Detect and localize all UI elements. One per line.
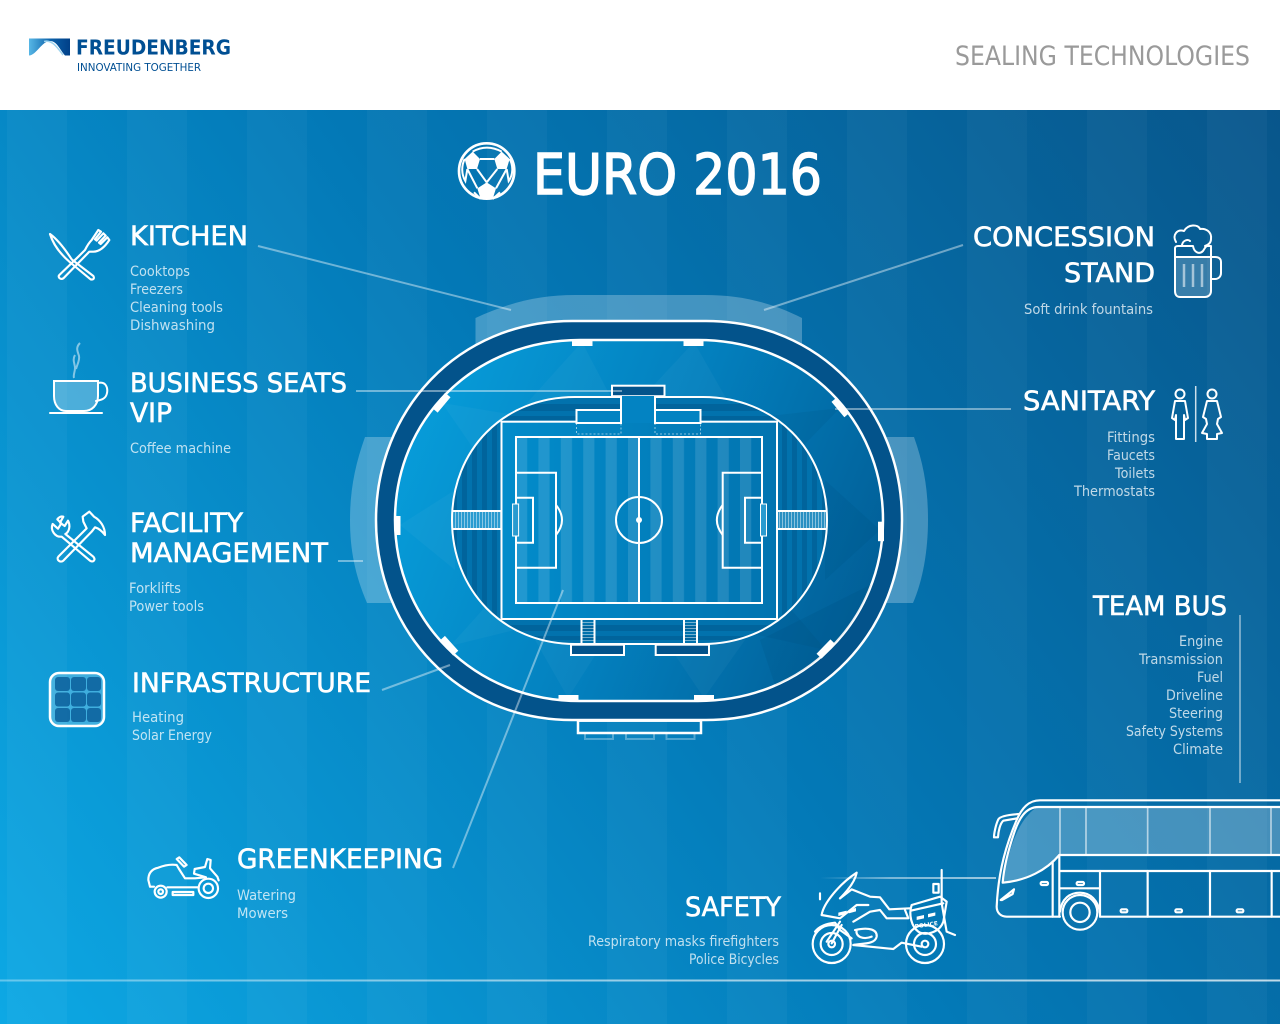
connector beam bbox=[820, 877, 996, 879]
panel: business seats VIP bbox=[50, 343, 347, 457]
floodlight beams bbox=[766, 584, 872, 686]
panel: team bus bbox=[1092, 591, 1227, 758]
stadium ring bbox=[376, 321, 902, 720]
panel: infrastructure: Heating bbox=[132, 710, 184, 726]
leader lines bbox=[258, 245, 1240, 868]
panel: sanitary: SANITARY bbox=[1023, 386, 1156, 417]
icon: wrench and hammer bbox=[52, 512, 105, 562]
panel: greenkeeping bbox=[148, 844, 443, 922]
panel: kitchen: Cooktops bbox=[130, 264, 190, 280]
panel: kitchen: Freezers bbox=[130, 282, 183, 298]
panel: team bus: Climate bbox=[1173, 742, 1223, 758]
icon: solar panel bbox=[50, 673, 104, 726]
floodlights bbox=[395, 340, 884, 701]
header logo: Freudenberg: FREUDENBERG bbox=[76, 36, 231, 60]
panel: safety: SAFETY bbox=[685, 892, 781, 923]
panel: business seats VIP: VIP bbox=[130, 398, 172, 429]
panel: facility management: FACILITY bbox=[130, 508, 243, 539]
panel: kitchen bbox=[50, 221, 248, 334]
panel: team bus: Fuel bbox=[1197, 670, 1223, 686]
panel: greenkeeping: GREENKEEPING bbox=[237, 844, 443, 875]
icon: knife and fork bbox=[50, 230, 109, 280]
panel: facility management: MANAGEMENT bbox=[130, 538, 329, 569]
panel: team bus: Transmission bbox=[1138, 652, 1223, 668]
panel: concession stand bbox=[973, 222, 1221, 318]
panel: greenkeeping: Mowers bbox=[237, 906, 288, 922]
panel: safety: Respiratory masks firefighters bbox=[588, 934, 779, 950]
panel: kitchen: KITCHEN bbox=[130, 221, 248, 252]
bottom stand bbox=[578, 721, 701, 739]
panel: safety: Police Bicycles bbox=[689, 952, 779, 968]
VIP stand at top bbox=[576, 386, 700, 434]
icon: ride-on mower bbox=[148, 857, 219, 898]
panel: greenkeeping: Watering bbox=[237, 888, 296, 904]
title: Euro 2016: EURO 2016 bbox=[533, 143, 822, 208]
panel: infrastructure: Solar Energy bbox=[132, 728, 212, 744]
icon: team bus bbox=[994, 800, 1280, 930]
panel: facility management: Power tools bbox=[129, 599, 204, 615]
panel: team bus: TEAM BUS bbox=[1092, 591, 1227, 622]
panel: sanitary: Faucets bbox=[1107, 448, 1155, 464]
stairs and lower stands bbox=[571, 619, 709, 655]
header logo: Freudenberg bbox=[29, 36, 231, 74]
panel: infrastructure: INFRASTRUCTURE bbox=[132, 668, 371, 699]
panel: facility management bbox=[52, 508, 329, 615]
icon: football bbox=[459, 143, 514, 199]
panel: business seats VIP: BUSINESS SEATS bbox=[130, 368, 347, 399]
panel: kitchen: Cleaning tools bbox=[130, 300, 223, 316]
panel: infrastructure bbox=[50, 668, 371, 744]
ground line bbox=[0, 980, 1280, 982]
panel: team bus: Steering bbox=[1169, 706, 1223, 722]
inner concourse bbox=[395, 340, 883, 701]
icon: coffee cup bbox=[50, 343, 107, 413]
panel: concession stand: CONCESSION bbox=[973, 222, 1155, 253]
panel: concession stand: STAND bbox=[1064, 258, 1155, 289]
bowl and stands bbox=[452, 397, 827, 644]
outer building sections bbox=[350, 295, 928, 603]
stadium bbox=[350, 295, 928, 739]
pitch bbox=[502, 422, 777, 619]
icon: police motorcycle bbox=[813, 870, 955, 963]
panel: sanitary bbox=[1023, 386, 1222, 500]
panel: safety bbox=[588, 892, 781, 968]
panel: sanitary: Fittings bbox=[1107, 430, 1155, 446]
panel: business seats VIP: Coffee machine bbox=[130, 441, 231, 457]
panel: team bus: Engine bbox=[1179, 634, 1223, 650]
panel: team bus: Driveline bbox=[1166, 688, 1223, 704]
icon: beer mug bbox=[1175, 225, 1221, 297]
panel: kitchen: Dishwashing bbox=[130, 318, 215, 334]
icon: police motorcycle: POLICE bbox=[914, 921, 939, 930]
panel: team bus: Safety Systems bbox=[1126, 724, 1223, 740]
panel: facility management: Forklifts bbox=[129, 581, 181, 597]
panel: sanitary: Thermostats bbox=[1073, 484, 1155, 500]
icon: restroom bbox=[1172, 386, 1222, 442]
panel: concession stand: Soft drink fountains bbox=[1024, 302, 1153, 318]
header logo: Freudenberg: INNOVATING TOGETHER bbox=[77, 62, 201, 74]
panel: sanitary: Toilets bbox=[1114, 466, 1155, 482]
